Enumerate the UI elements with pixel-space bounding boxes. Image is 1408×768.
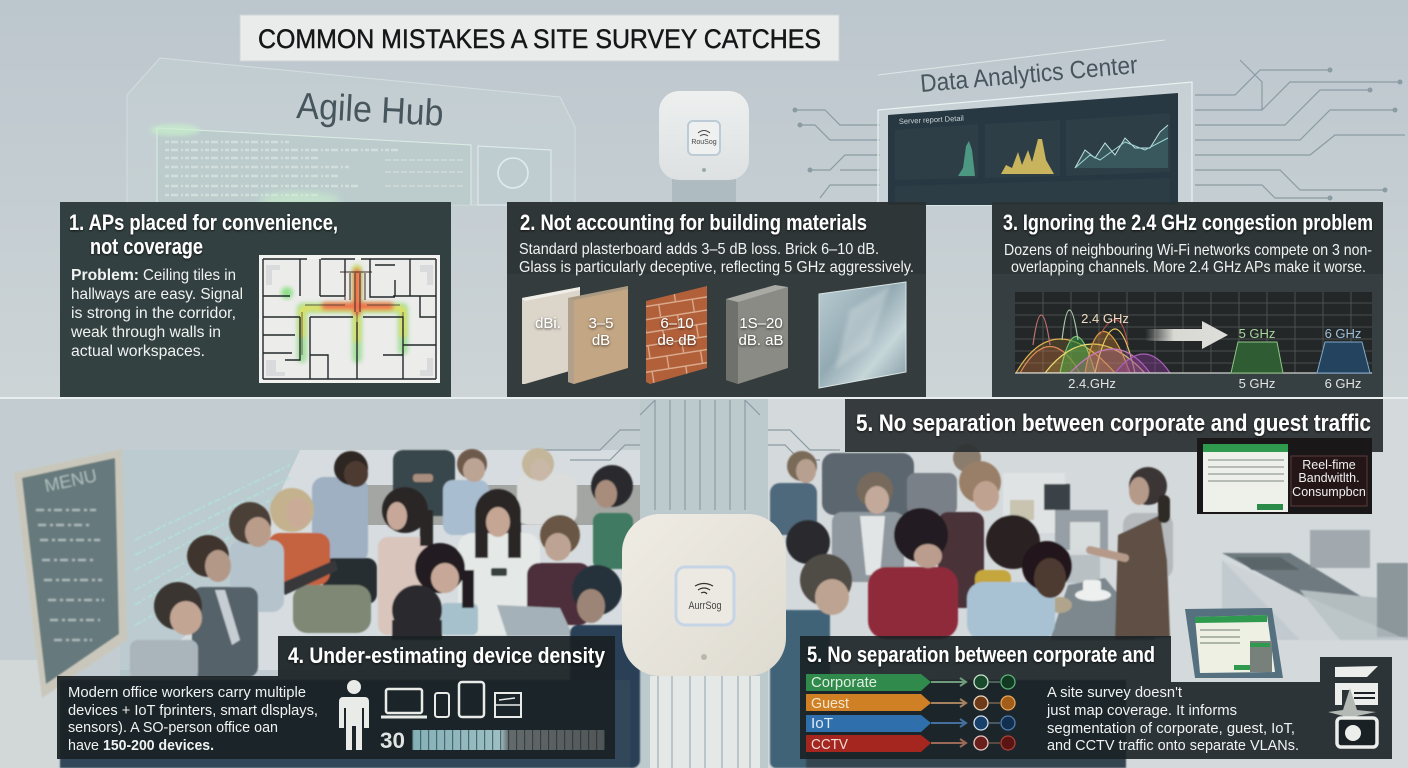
separator line	[0, 397, 1408, 399]
body 1: hallways are easy. Signal	[71, 286, 243, 303]
6 GHz band: 6 GHz	[1325, 326, 1361, 341]
panel: mistake 5 lower	[800, 636, 1392, 759]
chart labels	[1068, 311, 1361, 391]
body 4: 150-200 devices.	[103, 737, 214, 754]
icon: large ceiling access point	[622, 514, 786, 676]
panel: mistake 3	[992, 202, 1383, 397]
heading 5 partial: 5. No separation between corporate and	[807, 642, 1155, 667]
dashboard screen: Server report Detail	[899, 114, 964, 126]
circuit traces: lower centre	[540, 400, 840, 768]
chart labels: 5 GHz	[1239, 376, 1275, 391]
6 GHz band	[1317, 326, 1370, 373]
body 1: weak through walls in	[70, 324, 221, 341]
migration arrow	[1145, 321, 1228, 349]
body 4: Modern office workers carry multiple	[68, 684, 306, 701]
front row people	[770, 508, 1126, 768]
cafe counter	[1048, 578, 1155, 640]
body 3: overlapping channels. More 2.4 GHz APs make it worse.	[1011, 259, 1366, 276]
icon: phone	[435, 693, 449, 717]
label: Agile Hub: Agile Hub	[296, 85, 445, 134]
VLAN flow: corporate	[806, 674, 1015, 691]
body 1: is strong in the corridor,	[71, 305, 236, 322]
dashboard screen	[888, 93, 1178, 205]
chalk text overlay	[135, 465, 290, 625]
floor plan heatmap	[259, 255, 440, 383]
icon: person	[339, 680, 369, 750]
photo: right crowd and barista	[770, 444, 1408, 768]
material: plasterboard	[568, 286, 628, 384]
icon: segmentation symbol	[1328, 666, 1378, 747]
material: drywall: dBi.	[535, 315, 561, 332]
label: Data Analytics Center: Data Analytics Center	[919, 51, 1139, 98]
inset: real-time bandwidth dashboard: Reel-fime	[1302, 458, 1356, 472]
5 GHz band	[1231, 326, 1283, 373]
heading 1	[69, 210, 338, 259]
heading 1: not coverage	[90, 234, 203, 259]
middle row people	[786, 472, 1040, 606]
chart labels: 2.4 GHz	[1081, 311, 1129, 326]
body 1: Problem:	[71, 267, 139, 284]
VLAN flow: guest	[806, 694, 1015, 712]
spectrum chart	[1015, 292, 1372, 391]
heading 1: 1. APs placed for convenience,	[69, 210, 338, 235]
cafe shelving	[1003, 473, 1108, 583]
icon: large ceiling access point: AurrSog	[688, 600, 722, 612]
kitchen	[1222, 530, 1408, 640]
body 4: devices + IoT fprinters, smart dlsplays,	[68, 702, 318, 719]
background: lower office photo	[0, 399, 1408, 768]
heading 2: 2. Not accounting for building materials	[520, 210, 867, 235]
inset: real-time bandwidth dashboard: Consumpbcn	[1292, 485, 1366, 499]
material: brick	[646, 286, 707, 384]
barista	[1090, 467, 1173, 640]
body 1	[70, 267, 243, 360]
inset: real-time bandwidth dashboard: Bandwitlth.	[1298, 471, 1360, 485]
background: upper room	[0, 0, 1408, 398]
device density bar	[412, 730, 605, 750]
chart labels: 2.4.GHz	[1068, 376, 1116, 391]
circuit traces: upper right	[792, 60, 1405, 200]
VLAN flow: CCTV: CCTV	[811, 736, 848, 753]
material: concrete	[726, 285, 788, 384]
icon: display	[495, 693, 521, 717]
body 1: actual workspaces.	[71, 343, 205, 360]
material: concrete: dB. aB	[738, 332, 784, 349]
photo: left crowd of office workers	[60, 448, 640, 768]
overlapping 2.4 GHz channels	[1016, 310, 1170, 373]
icon: small ceiling access point	[659, 91, 749, 203]
VLAN flow: IoT: IoT	[811, 715, 833, 732]
inset: real-time bandwidth dashboard	[1197, 438, 1372, 514]
body 2: Glass is particularly deceptive, reflecting 5 GHz aggressively.	[519, 259, 914, 276]
body 5: segmentation of corporate, guest, IoT,	[1047, 720, 1295, 737]
icon: laptop	[381, 689, 427, 717]
body 5: and CCTV traffic onto separate VLANs.	[1047, 737, 1299, 754]
front row people	[60, 543, 640, 768]
5 GHz band: 5 GHz	[1239, 326, 1275, 341]
material: brick: 6–10	[660, 315, 694, 332]
body 2	[519, 241, 914, 276]
body 4	[68, 684, 318, 754]
decoration: chalk menu board	[14, 449, 127, 698]
material: plasterboard: dB	[592, 332, 610, 349]
panel: mistake 4	[57, 636, 615, 759]
decoration: chalk menu board: MENU	[43, 465, 99, 496]
icon: tablet	[459, 682, 484, 717]
chart labels: 6 GHz	[1325, 376, 1361, 391]
body 3	[1004, 242, 1372, 276]
body 4: sensors). A SO-person office oan	[68, 719, 278, 736]
panel: mistake 5 top banner	[845, 399, 1383, 452]
body 4: have	[68, 737, 99, 754]
back row people	[770, 444, 1001, 608]
dial screen	[478, 146, 551, 205]
VLAN flow: CCTV	[806, 735, 1015, 753]
material: drywall	[522, 287, 580, 384]
VLAN flow: corporate: Corporate	[811, 674, 877, 691]
material: concrete: 1S–20	[739, 315, 783, 332]
code screen	[150, 124, 471, 208]
material: glass	[819, 282, 906, 388]
title banner: COMMON MISTAKES A SITE SURVEY CATCHES	[258, 24, 821, 54]
mid row people	[187, 487, 591, 677]
panel: mistake 2	[507, 202, 926, 397]
inset: bandwidth tablet	[1185, 608, 1283, 678]
VLAN flow: IoT	[806, 715, 1015, 732]
body 1: Ceiling tiles in	[143, 267, 236, 284]
panel: mistake 1	[60, 202, 451, 397]
body 5	[1046, 684, 1299, 754]
panel: Data Analytics Center	[878, 40, 1192, 205]
material: plasterboard: 3–5	[588, 315, 614, 332]
back row people	[312, 448, 633, 604]
body 2: Standard plasterboard adds 3–5 dB loss. Brick 6–10 dB.	[519, 241, 879, 258]
body 5: just map coverage. It informs	[1046, 702, 1237, 719]
heading 4: 4. Under-estimating device density	[288, 643, 606, 668]
body 5: A site survey doesn't	[1047, 684, 1183, 701]
material: brick: de dB	[657, 332, 697, 349]
VLAN flow: guest: Guest	[811, 695, 850, 712]
icon: small ceiling access point: RouSog	[691, 139, 717, 146]
device count: 30	[380, 728, 405, 753]
panel: Agile Hub glass screen	[127, 58, 575, 208]
chart axis	[1015, 372, 1372, 374]
title banner	[240, 15, 839, 61]
